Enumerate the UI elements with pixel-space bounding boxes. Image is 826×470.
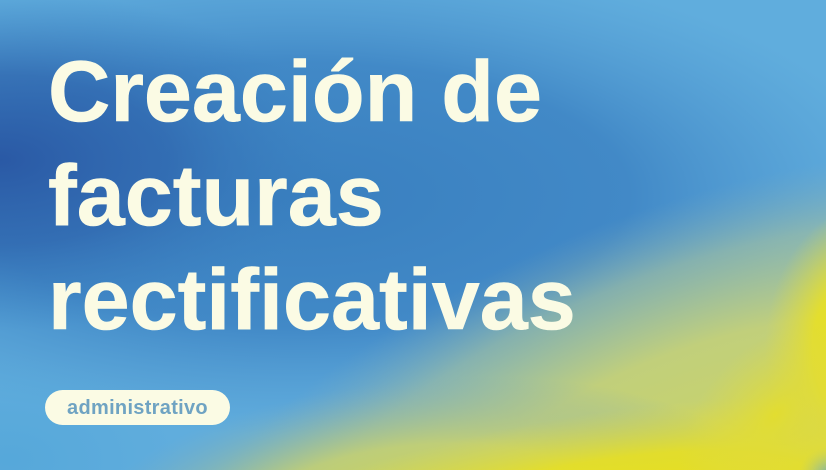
title [48, 44, 576, 348]
title: Creación de [48, 44, 542, 140]
title: facturas [48, 148, 384, 244]
title: rectificativas [48, 252, 576, 348]
category pill: administrativo: administrativo [67, 397, 208, 419]
category pill: administrativo [45, 390, 230, 425]
